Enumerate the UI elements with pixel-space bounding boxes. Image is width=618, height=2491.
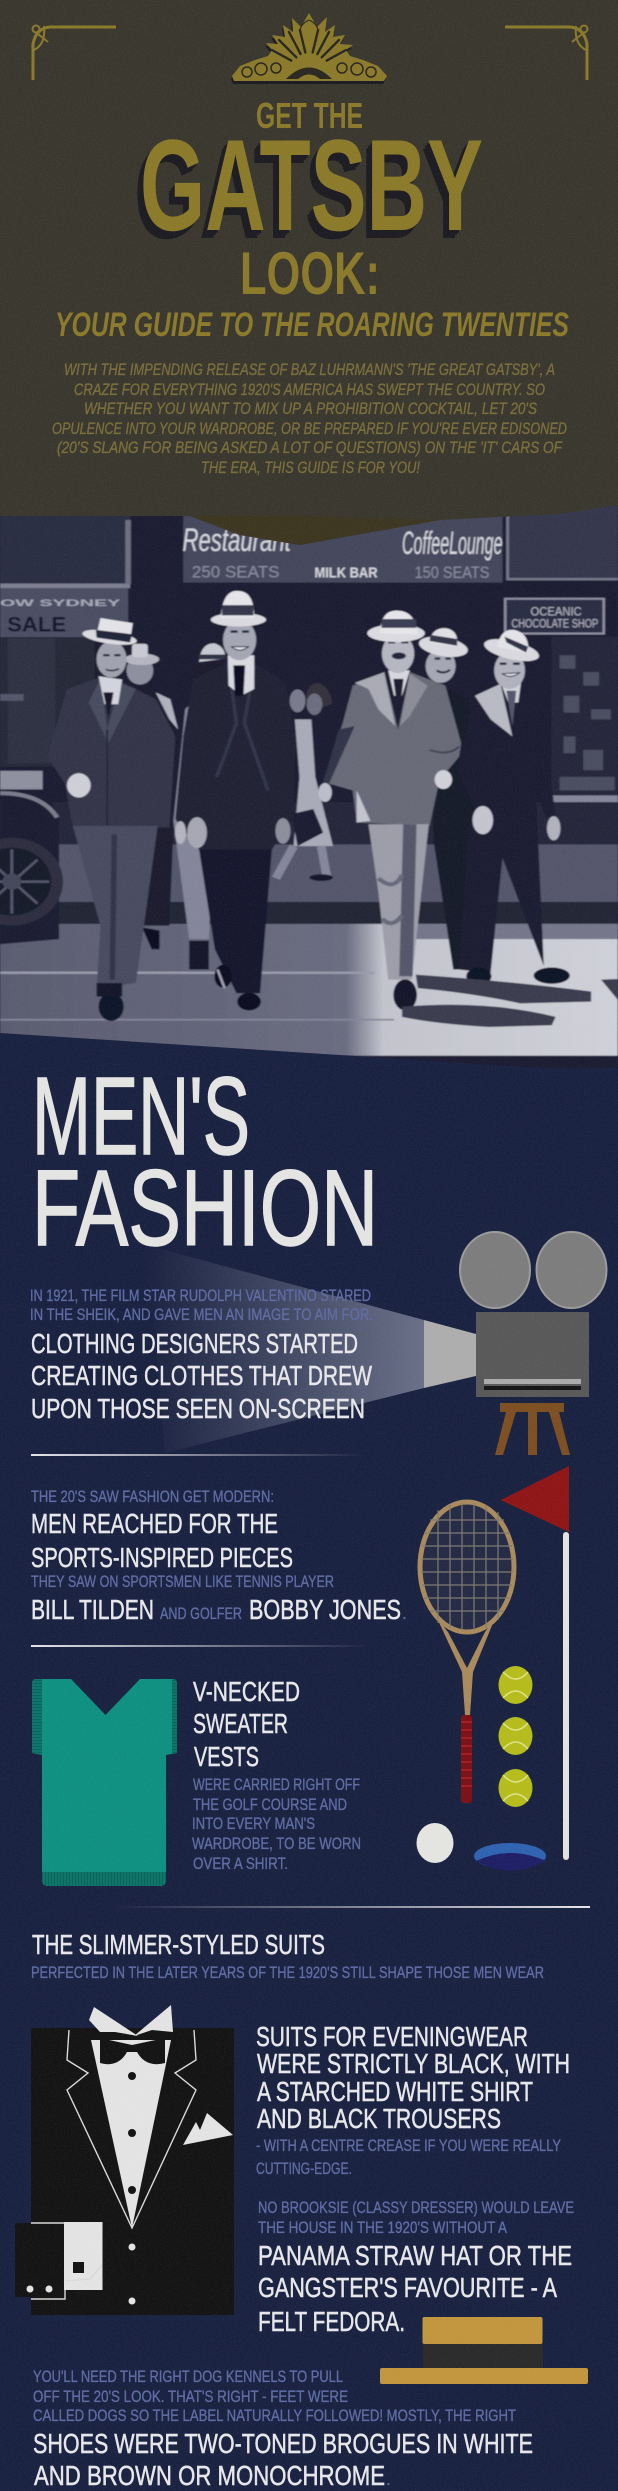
text: v-necked sweater vests [192, 1676, 361, 1873]
sign text in photo: Restaurant [182, 523, 292, 558]
text: dog kennels and shoes: YOU'LL NEED THE RIGHT DOG KENNELS TO PULL [33, 2367, 343, 2386]
text: suits for eveningwear: AND BLACK TROUSERS [257, 2103, 501, 2134]
background woman [276, 683, 333, 881]
text: clothing designers: CLOTHING DESIGNERS STARTED [31, 1328, 358, 1359]
icon: film projector [424, 1232, 606, 1455]
man 3 [318, 611, 461, 1010]
text: modern sports [31, 1487, 407, 1625]
text: modern sports: THEY SAW ON SPORTSMEN LIKE TENNIS PLAYER [31, 1572, 334, 1591]
text: valentino intro: IN THE SHEIK, AND GAVE MEN AN IMAGE TO AIM FOR. [30, 1305, 373, 1324]
heading: get the: GET THE [256, 95, 363, 136]
icon: straw hat [380, 2317, 588, 2384]
sign text in photo: OCEANIC [530, 605, 582, 618]
icon: tennis racket [420, 1502, 514, 1803]
text: v-necked sweater vests: SWEATER [193, 1708, 288, 1739]
text: v-necked sweater vests: V-NECKED [193, 1676, 300, 1707]
text: slimmer-styled suits [31, 1929, 544, 1982]
text: valentino intro [30, 1286, 373, 1324]
text: brooksie and hats: FELT FEDORA. [258, 2306, 405, 2337]
text: dog kennels and shoes [33, 2367, 533, 2491]
photo: five men in suits and boater hats crossing the street [0, 500, 618, 1068]
icon: right corner ornament [505, 26, 588, 80]
text: modern sports: BOBBY JONES [249, 1594, 401, 1625]
text: slimmer-styled suits: THE SLIMMER-STYLED SUITS [32, 1929, 325, 1960]
man 5 [457, 630, 570, 985]
text: dog kennels and shoes: AND BROWN OR MONOCHROME [34, 2460, 385, 2491]
text: v-necked sweater vests: THE GOLF COURSE AND [193, 1795, 347, 1814]
text: dog kennels and shoes: OFF THE 20'S LOOK. THAT'S RIGHT - FEET WERE [33, 2387, 348, 2406]
text: brooksie and hats: THE HOUSE IN THE 1920'S WITHOUT A [258, 2218, 508, 2237]
text: clothing designers: CREATING CLOTHES THAT DREW [31, 1360, 372, 1391]
text: v-necked sweater vests: WARDROBE, TO BE WORN [192, 1834, 361, 1853]
text: modern sports: BILL TILDEN [31, 1594, 154, 1625]
man behind centre [173, 643, 227, 970]
text: brooksie and hats [258, 2198, 574, 2337]
man 2 [175, 591, 296, 1010]
man 1 [47, 618, 175, 1021]
icon: sweater vest [32, 1679, 177, 1886]
text: modern sports: MEN REACHED FOR THE [31, 1508, 278, 1539]
text: valentino intro: IN 1921, THE FILM STAR RUDOLPH VALENTINO STARED [30, 1286, 371, 1305]
icon: tuxedo [15, 2005, 234, 2315]
icon: golf flag, ball and hole [416, 1466, 569, 1870]
text: v-necked sweater vests: OVER A SHIRT. [193, 1854, 288, 1873]
projector light beam [146, 1245, 424, 1453]
cast shadows on the road [402, 975, 618, 1027]
text: v-necked sweater vests: INTO EVERY MAN'S [192, 1814, 315, 1833]
text: modern sports: SPORTS-INSPIRED PIECES [31, 1542, 293, 1573]
text: modern sports: AND GOLFER [160, 1604, 242, 1623]
sign text in photo: MILK BAR [314, 565, 378, 581]
sign text in photo: 250 SEATS [192, 562, 279, 581]
text: suits for eveningwear [256, 2021, 570, 2178]
text: suits for eveningwear: CUTTING-EDGE. [256, 2159, 352, 2178]
icon: tennis balls [498, 1666, 532, 1807]
sign text in photo: OW SYDNEY [0, 598, 120, 609]
man 4 behind [417, 628, 491, 970]
sign text in photo [0, 523, 604, 636]
text: suits for eveningwear: SUITS FOR EVENINGWEAR [256, 2021, 528, 2052]
panel: men's fashion [0, 1033, 618, 2491]
sign text in photo: 150 SEATS [415, 562, 489, 582]
panel: header [0, 0, 618, 545]
text: modern sports: THE 20'S SAW FASHION GET MODERN: [31, 1487, 274, 1506]
text: clothing designers [31, 1328, 372, 1424]
icon: left corner ornament [32, 26, 116, 80]
man behind left [125, 644, 178, 949]
intro paragraph [52, 360, 567, 477]
heading: fashion: FASHION [32, 1147, 378, 1268]
text: v-necked sweater vests: WERE CARRIED RIGHT OFF [193, 1775, 360, 1794]
text: dog kennels and shoes: . [386, 2470, 391, 2489]
text: modern sports: . [402, 1604, 407, 1623]
text: suits for eveningwear: A STARCHED WHITE SHIRT [257, 2076, 533, 2107]
text: clothing designers: UPON THOSE SEEN ON-SCREEN [31, 1393, 365, 1424]
sign text in photo: SALE [7, 612, 66, 636]
intro paragraph: THE ERA, THIS GUIDE IS FOR YOU! [201, 458, 420, 477]
car at left [0, 768, 63, 944]
text: v-necked sweater vests: VESTS [194, 1741, 259, 1772]
heading: men's: MEN'S [32, 1055, 250, 1178]
heading: look: LOOK: [240, 240, 380, 307]
icon: art deco fan ornament [231, 13, 387, 84]
